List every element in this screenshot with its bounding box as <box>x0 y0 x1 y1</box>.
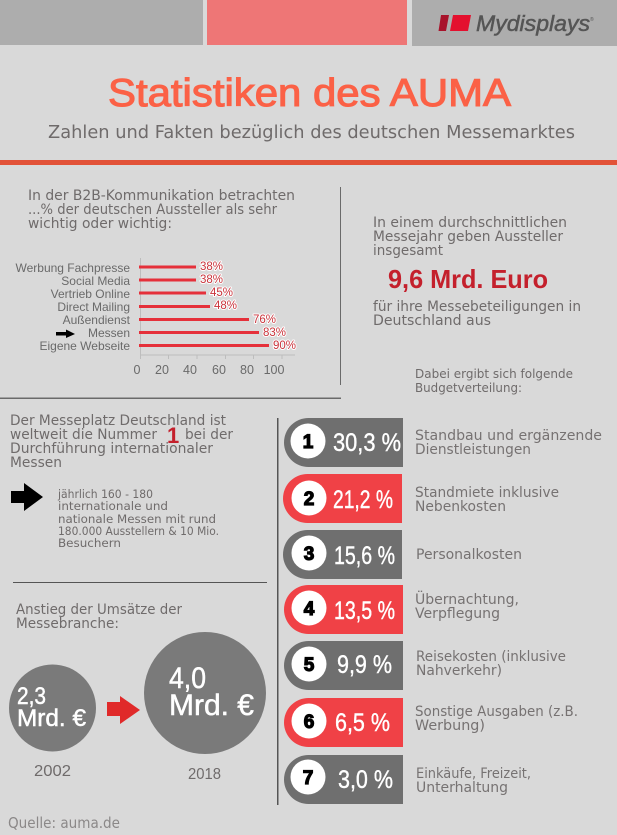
chart category labels: Messen <box>88 326 130 340</box>
logo: Mydisplays: ® <box>590 16 594 23</box>
budget item 6: 6,5 % <box>335 709 390 737</box>
budget item 7 <box>284 755 531 804</box>
bar chart: importance of communication channels <box>15 258 296 377</box>
icon: arrow pointing at Messen <box>56 330 75 338</box>
budget item 1: 30,3 % <box>333 429 401 457</box>
budget item 7: 3,0 % <box>338 766 393 794</box>
budget item 6: 6 <box>304 712 314 733</box>
circle: 2018 revenue: Mrd. € <box>169 689 254 722</box>
budget item 2: 21,2 % <box>333 486 393 514</box>
text block: B2B communication intro: ...% der deutschen Aussteller als sehr <box>28 202 277 218</box>
chart category labels: Werbung Fachpresse <box>15 261 130 275</box>
text block: Germany number one: Der Messeplatz Deutschland ist <box>10 413 226 429</box>
budget item 1 <box>284 418 602 467</box>
chart axis labels: 80 <box>240 363 254 377</box>
chart value labels: 38% <box>200 274 223 286</box>
key figure: 9,6 Mrd. Euro: 9,6 Mrd. Euro <box>388 264 548 294</box>
chart category labels: Vertrieb Online <box>51 287 130 301</box>
budget item 4: Übernachtung, <box>415 590 519 608</box>
budget item 2: Nebenkosten <box>415 499 506 515</box>
budget item 5: Reisekosten (inklusive <box>416 649 566 665</box>
text block: Germany number one: Durchführung internationaler <box>10 441 213 457</box>
budget item 7: Unterhaltung <box>416 780 508 796</box>
chart axis labels: 40 <box>183 363 197 377</box>
text block: average spend: insgesamt <box>373 243 443 259</box>
text block: budget intro <box>415 366 573 395</box>
chart bars <box>139 266 269 347</box>
budget item 6 <box>284 698 578 747</box>
text block: annual trade fairs <box>57 487 219 550</box>
budget item 3: Personalkosten <box>416 547 522 563</box>
chart value labels: 45% <box>210 287 233 299</box>
budget item 1: 1 <box>303 432 314 453</box>
chart value labels: 48% <box>214 300 237 312</box>
year label: 2018: 2018 <box>188 766 221 783</box>
budget item 5: 5 <box>304 655 315 676</box>
budget item 4 <box>284 585 519 634</box>
text block: revenue growth heading <box>16 602 182 632</box>
text block: average spend: Deutschland aus <box>373 313 491 329</box>
text block: B2B communication intro: In der B2B-Kommunikation betrachten <box>28 188 295 204</box>
logo: Mydisplays <box>438 11 594 36</box>
budget item 4: 13,5 % <box>334 597 395 625</box>
text block: Germany number one: Messen <box>10 455 62 471</box>
source note: Quelle: auma.de <box>8 814 120 832</box>
chart value labels: 76% <box>253 314 276 326</box>
circle: 2002 revenue: Mrd. € <box>17 705 87 732</box>
text block: annual trade fairs: jährlich 160 - 180 <box>57 487 153 501</box>
chart axis labels: 60 <box>212 363 226 377</box>
budget item 2: 2 <box>304 489 314 510</box>
circle: 2002 revenue: 2,3 <box>17 683 46 710</box>
chart axis labels <box>134 363 284 377</box>
text block: B2B communication intro <box>28 188 295 232</box>
chart axis labels: 20 <box>155 363 169 377</box>
budget item 3: 15,6 % <box>334 542 395 570</box>
chart category labels: Außendienst <box>63 313 131 327</box>
chart value labels: 90% <box>273 340 296 352</box>
budget item 1: Standbau und ergänzende <box>415 428 602 444</box>
text block: budget intro: Dabei ergibt sich folgende <box>415 366 573 381</box>
budget item 4: Verpflegung <box>415 606 500 622</box>
budget item 3 <box>283 530 522 579</box>
key figure: 1: 1 <box>167 423 179 448</box>
year label: 2002: 2002 <box>34 763 71 780</box>
text block: Germany number one: bei der <box>185 427 233 443</box>
budget item 5: 9,9 % <box>337 651 392 679</box>
text block: annual trade fairs: nationale Messen mit rund <box>58 512 216 526</box>
budget item 5: Nahverkehr) <box>416 663 502 679</box>
budget item 7: Einkäufe, Freizeit, <box>416 766 531 782</box>
text block: B2B communication intro: wichtig oder wichtig: <box>28 216 172 232</box>
chart value labels: 83% <box>263 327 286 339</box>
text block: Germany number one <box>10 413 233 471</box>
text block: average spend: In einem durchschnittlichen <box>373 215 567 231</box>
panel: budget distribution list <box>283 418 602 804</box>
text block: revenue growth heading: Anstieg der Umsätze der <box>16 602 182 618</box>
chart category labels: Direct Mailing <box>57 300 130 314</box>
header: colour blocks and logo <box>0 0 617 46</box>
budget item 3: 3 <box>304 544 314 565</box>
chart category labels: Social Media <box>61 274 130 288</box>
chart category labels: Eigene Webseite <box>39 339 130 353</box>
chart axis labels: 100 <box>264 363 284 377</box>
circle: 2002 revenue <box>9 664 96 752</box>
title: Statistiken des AUMA <box>108 72 511 115</box>
subtitle: Zahlen und Fakten bezüglich des deutschen Messemarktes <box>48 123 575 143</box>
chart category labels <box>15 261 131 353</box>
chart axis labels: 0 <box>134 363 141 377</box>
text block: budget intro: Budgetverteilung: <box>415 380 522 395</box>
text block: Germany number one: weltweit die Nummer <box>10 427 157 443</box>
icon: black arrow <box>11 483 43 511</box>
budget item 2: Standmiete inklusive <box>415 485 559 501</box>
text block: annual trade fairs: internationale und <box>58 499 168 513</box>
text block: average spend: für ihre Messebeteiligungen in <box>373 299 581 315</box>
budget item 6: Werbung) <box>415 718 485 734</box>
chart value labels: 38% <box>200 261 223 273</box>
text block: annual trade fairs: 180.000 Ausstellern & 10 Mio. <box>58 524 219 538</box>
text block: average spend: Messejahr geben Aussteller <box>373 229 563 245</box>
text block: revenue growth heading: Messebranche: <box>16 616 119 632</box>
circle: 2018 revenue: 4,0 <box>169 662 206 695</box>
budget item 6: Sonstige Ausgaben (z.B. <box>415 704 578 720</box>
budget item 1: Dienstleistungen <box>415 442 531 458</box>
logo: Mydisplays: Mydisplays <box>476 11 590 36</box>
text block: average spend <box>373 215 581 329</box>
budget item 4: 4 <box>304 599 315 620</box>
budget item 2 <box>283 474 559 523</box>
arrow: growth <box>107 696 140 724</box>
budget item 5 <box>284 641 566 690</box>
chart value labels <box>200 261 296 352</box>
circle: 2018 revenue <box>144 632 266 754</box>
text block: annual trade fairs: Besuchern <box>58 536 121 550</box>
budget item 7: 7 <box>303 768 313 789</box>
